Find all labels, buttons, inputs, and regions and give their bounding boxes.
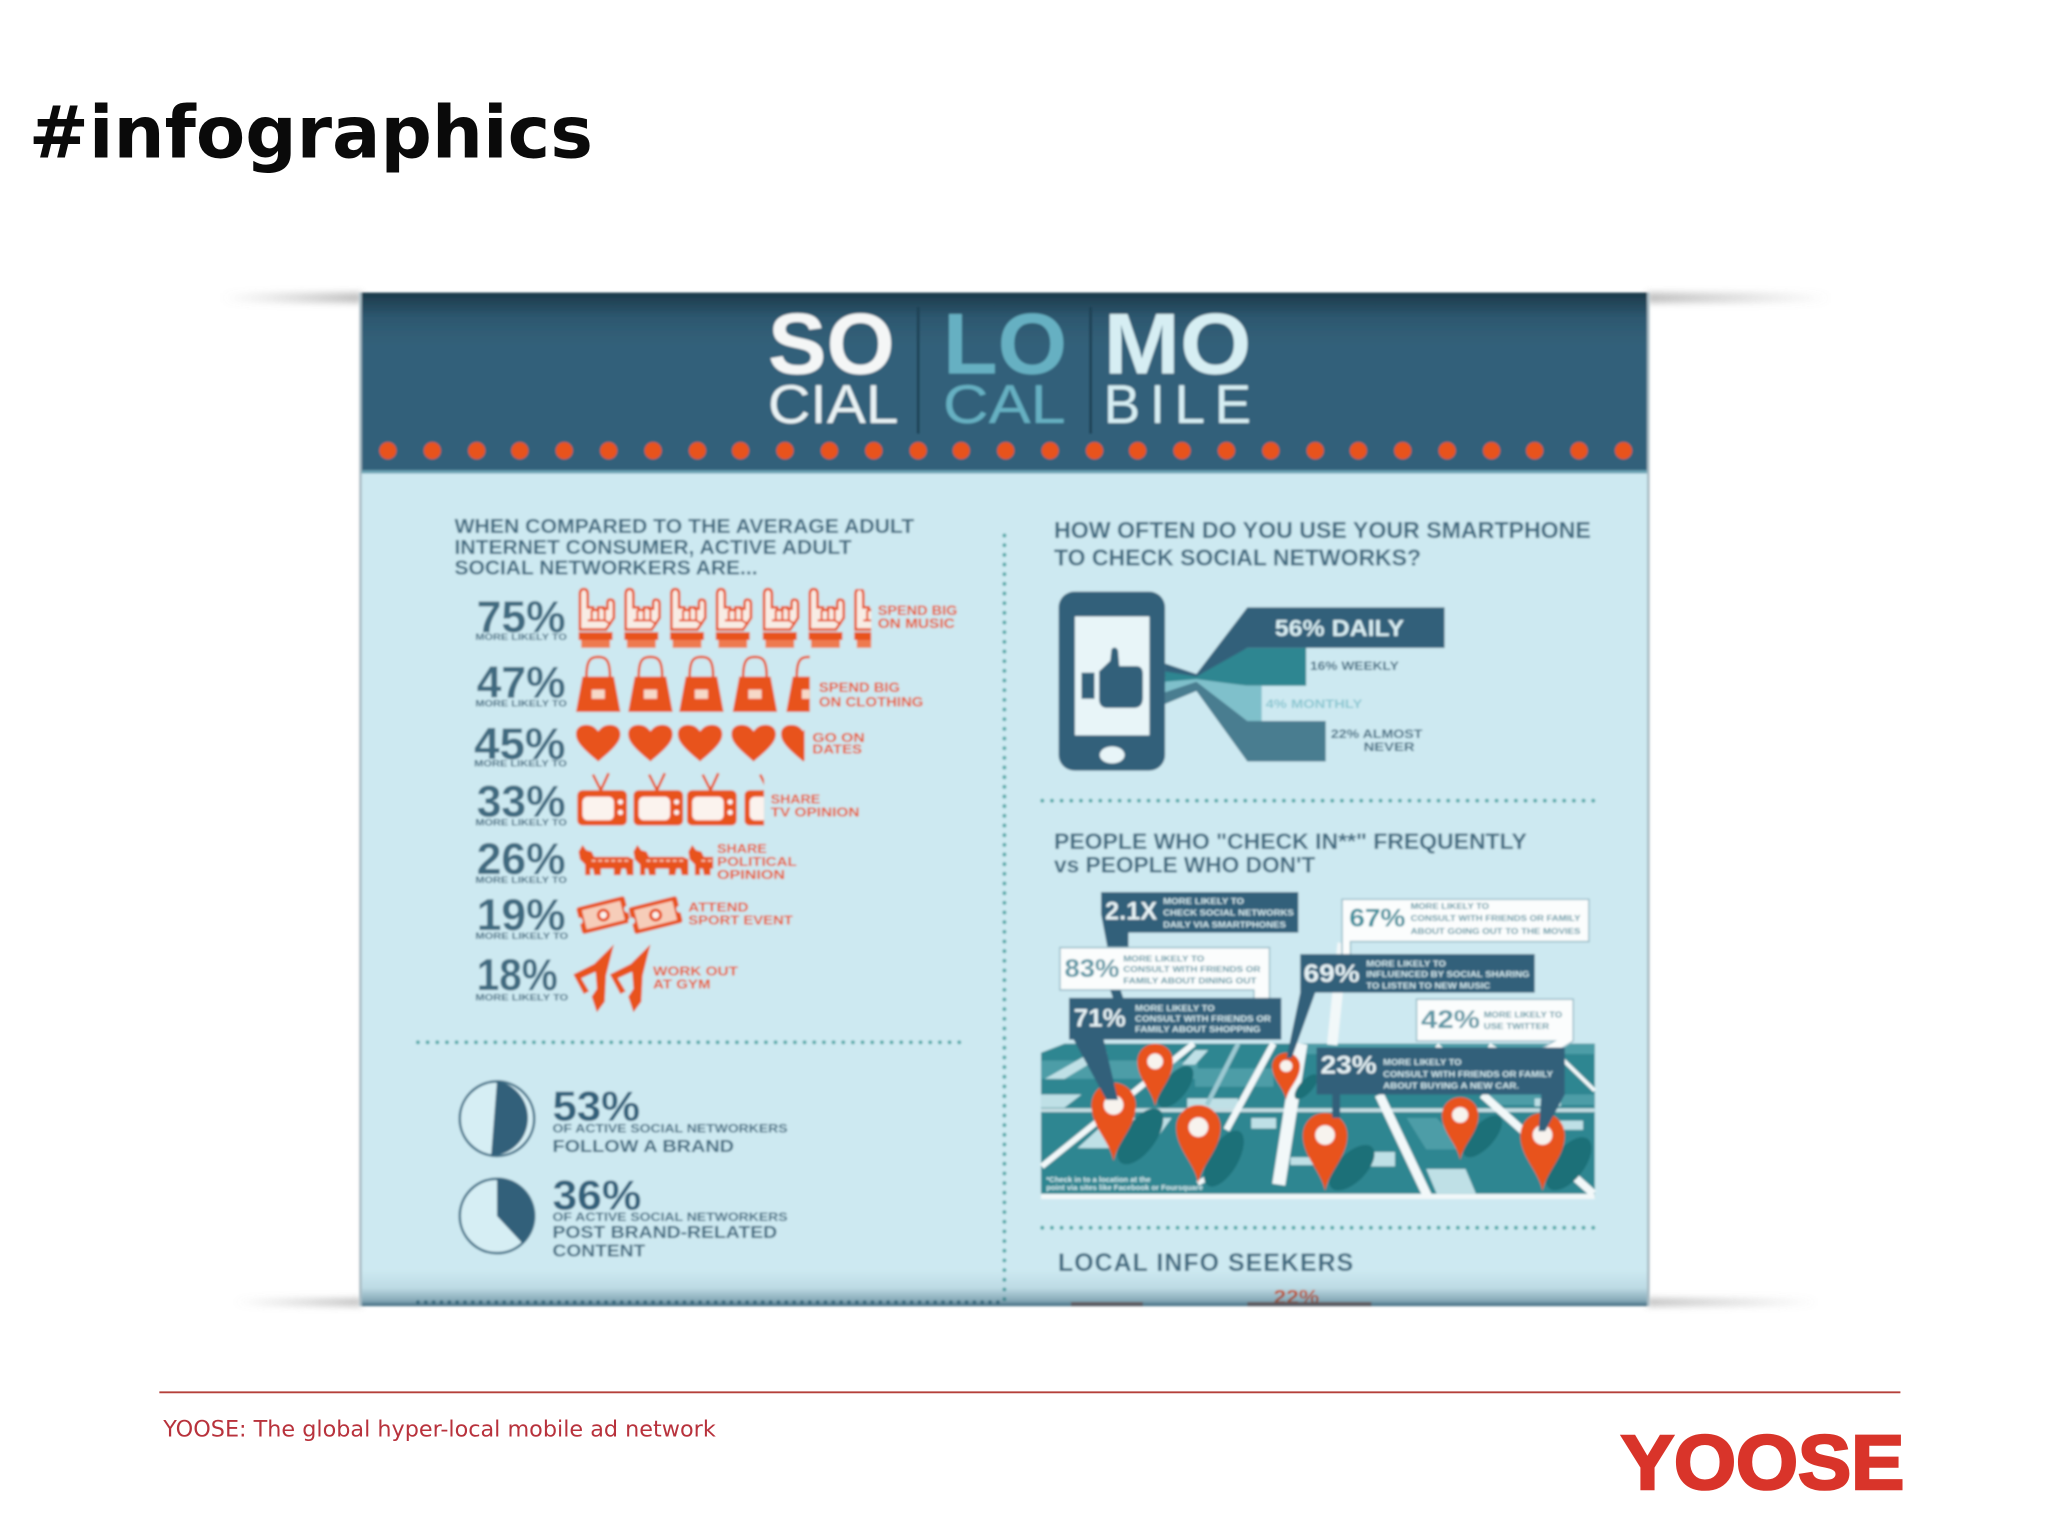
map footnote: *Check in to a location at the <box>1046 1176 1151 1184</box>
row: 33% tv opinion <box>475 773 859 827</box>
smartphone heading: HOW OFTEN DO YOU USE YOUR SMARTPHONE <box>1054 517 1591 543</box>
callout: 83%: CONSULT WITH FRIENDS OR <box>1123 964 1260 974</box>
callout: 67%: ABOUT GOING OUT TO THE MOVIES <box>1411 926 1581 936</box>
LOCAL wordmark: CAL <box>943 373 1066 435</box>
map illustration <box>1041 943 1600 1199</box>
SOCIAL wordmark: CIAL <box>768 373 899 435</box>
callout: 23%: 23% <box>1320 1053 1377 1080</box>
icon: donkeys <box>579 845 743 875</box>
cropped chart fragment <box>1071 1287 1371 1309</box>
icon: phone with thumbs up <box>1059 592 1165 771</box>
MOBILE wordmark: MO <box>1104 297 1251 393</box>
smartphone heading: TO CHECK SOCIAL NETWORKS? <box>1054 545 1421 571</box>
funnel chart: 16% WEEKLY <box>1310 660 1399 673</box>
label <box>771 791 859 819</box>
mid-tone blocks <box>1041 1044 1595 1149</box>
pie: 53% follow a brand <box>460 1081 788 1156</box>
label: DATES <box>812 742 862 757</box>
row: 18% gym <box>475 944 738 1012</box>
row: 47% clothing <box>475 657 923 712</box>
label: SHARE <box>717 841 767 856</box>
pie: 36% post brand content <box>460 1171 788 1260</box>
footer tagline: YOOSE: The global hyper-local mobile ad network <box>162 1417 716 1443</box>
label: TV OPINION <box>771 804 859 819</box>
infographic screenshot <box>222 293 1830 1309</box>
local info seekers heading: LOCAL INFO SEEKERS <box>1058 1250 1353 1277</box>
pale city blocks <box>1041 1050 1583 1194</box>
callout: 2.1X: 2.1X <box>1105 899 1158 926</box>
callout: 67%: 67% <box>1349 906 1405 933</box>
smartphone heading <box>1054 517 1591 571</box>
label: WORK OUT <box>653 964 738 979</box>
callout: 42% <box>1416 999 1573 1049</box>
callout: 23%: MORE LIKELY TO <box>1383 1057 1462 1067</box>
callout: 83%: 83% <box>1064 956 1119 983</box>
callout: 2.1X: DAILY VIA SMARTPHONES <box>1163 919 1286 929</box>
pie: 53% follow a brand: OF ACTIVE SOCIAL NETWORKERS <box>552 1122 788 1135</box>
pie: 36% post brand content: POST BRAND-RELATED <box>552 1222 777 1242</box>
MOBILE wordmark: BILE <box>1104 373 1251 435</box>
left column heading: INTERNET CONSUMER, ACTIVE ADULT <box>455 537 852 559</box>
icon: gymnasts <box>573 944 650 1012</box>
slide title: #infographics <box>29 90 593 174</box>
icon: foam hands <box>579 589 889 648</box>
row: 26% political opinion: MORE LIKELY TO <box>475 875 567 885</box>
callout: 67%: MORE LIKELY TO <box>1411 901 1489 911</box>
pie: 36% post brand content: 36% <box>552 1171 641 1218</box>
row: 19% sport event <box>475 891 793 941</box>
map footnote <box>1046 1176 1203 1192</box>
callout: 71%: FAMILY ABOUT SHOPPING <box>1135 1024 1261 1034</box>
funnel chart: 22% ALMOST <box>1331 728 1423 741</box>
callout: 42%: USE TWITTER <box>1484 1021 1549 1031</box>
location pins <box>1091 1044 1565 1191</box>
funnel chart: NEVER <box>1364 741 1415 754</box>
pie: 53% follow a brand: FOLLOW A BRAND <box>552 1136 734 1156</box>
left column heading <box>455 516 915 580</box>
row: 45% dates: MORE LIKELY TO <box>474 759 567 769</box>
label <box>688 900 793 928</box>
icon: handbags <box>576 657 831 712</box>
callout: 83% <box>1060 948 1270 999</box>
YOOSE logo: YOOSE <box>1621 1420 1904 1506</box>
LOCAL wordmark: LO <box>943 297 1067 393</box>
label <box>812 730 865 757</box>
pie chart 36 <box>460 1178 534 1253</box>
callout: 71% <box>1069 990 1281 1100</box>
label: SHARE <box>771 791 821 806</box>
callout: 71%: MORE LIKELY TO <box>1135 1003 1215 1013</box>
pie: 36% post brand content: CONTENT <box>552 1240 645 1260</box>
check-in heading <box>1054 829 1527 877</box>
icon: hearts <box>576 725 825 761</box>
orange dot row <box>379 442 1632 459</box>
label <box>878 603 957 631</box>
callout: 42%: MORE LIKELY TO <box>1484 1009 1563 1019</box>
callout: 69%: INFLUENCED BY SOCIAL SHARING <box>1366 969 1530 979</box>
callout: 69% <box>1287 954 1535 1058</box>
callout: 67% <box>1342 899 1589 956</box>
callout: 23% <box>1317 1048 1565 1131</box>
label: SPEND BIG <box>819 680 900 695</box>
callout: 71%: CONSULT WITH FRIENDS OR <box>1135 1013 1271 1023</box>
check-in heading: vs PEOPLE WHO DON'T <box>1054 852 1316 877</box>
row: 19% sport event: MORE LIKELY TO <box>475 931 568 941</box>
callout: 83%: FAMILY ABOUT DINING OUT <box>1123 976 1257 986</box>
pie: 36% post brand content: OF ACTIVE SOCIAL NETWORKERS <box>552 1211 788 1224</box>
label: GO ON <box>812 730 865 745</box>
funnel chart: 56% DAILY <box>1275 615 1404 641</box>
callout: 71%: 71% <box>1074 1006 1126 1033</box>
row: 18% gym: 18% <box>477 951 558 1000</box>
row: 75% music: 75% <box>477 593 566 642</box>
callout: 69%: 69% <box>1304 961 1360 988</box>
callout: 83%: MORE LIKELY TO <box>1123 953 1205 963</box>
callout: 42%: 42% <box>1421 1007 1480 1034</box>
SOCIAL wordmark <box>768 297 899 435</box>
row: 18% gym: MORE LIKELY TO <box>475 992 568 1002</box>
row: 47% clothing: 47% <box>477 658 566 707</box>
MOBILE wordmark <box>1104 297 1251 435</box>
LOCAL wordmark <box>943 297 1067 435</box>
shadow wings <box>222 293 1830 1306</box>
row: 75% music <box>475 589 957 648</box>
roads <box>1041 943 1595 1196</box>
panel background <box>359 293 1650 1306</box>
left column heading: WHEN COMPARED TO THE AVERAGE ADULT <box>455 516 915 538</box>
callout: 2.1X <box>1101 892 1298 948</box>
row: 47% clothing: MORE LIKELY TO <box>475 699 567 709</box>
label <box>653 964 738 992</box>
callout: 69%: MORE LIKELY TO <box>1366 959 1446 969</box>
row: 45% dates <box>474 720 865 769</box>
label: SPORT EVENT <box>688 913 793 928</box>
funnel chart <box>1165 607 1445 761</box>
callout: 2.1X: MORE LIKELY TO <box>1163 896 1245 906</box>
label: SPEND BIG <box>878 603 957 618</box>
header banner <box>362 293 1647 473</box>
label <box>819 680 923 710</box>
funnel chart: 4% MONTHLY <box>1266 698 1362 711</box>
callout: 23%: CONSULT WITH FRIENDS OR FAMILY <box>1383 1069 1553 1079</box>
bottom shadow <box>362 1270 1647 1306</box>
row: 26% political opinion <box>475 835 797 885</box>
icon: tickets <box>573 895 686 935</box>
row: 45% dates: 45% <box>474 720 566 769</box>
pie: 53% follow a brand: 53% <box>552 1083 640 1130</box>
label: AT GYM <box>653 977 711 992</box>
pie chart 53 <box>460 1081 534 1156</box>
callout: 23%: ABOUT BUYING A NEW CAR. <box>1383 1081 1519 1091</box>
label: ON CLOTHING <box>819 695 923 710</box>
label: ON MUSIC <box>878 616 955 631</box>
row: 19% sport event: 19% <box>477 891 566 940</box>
callout: 69%: TO LISTEN TO NEW MUSIC <box>1366 981 1490 991</box>
pin shadows <box>1108 1060 1600 1198</box>
callout: 67%: CONSULT WITH FRIENDS OR FAMILY <box>1411 913 1581 923</box>
label: ATTEND <box>688 900 748 915</box>
footer rule <box>159 1391 1900 1393</box>
map footnote: point via sites like Facebook or Foursquare <box>1046 1184 1203 1192</box>
icon: televisions <box>577 773 794 825</box>
row: 33% tv opinion: 33% <box>477 777 566 826</box>
label: POLITICAL <box>717 854 797 869</box>
callout: 2.1X: CHECK SOCIAL NETWORKS <box>1163 908 1294 918</box>
label: OPINION <box>717 867 785 882</box>
row: 33% tv opinion: MORE LIKELY TO <box>475 817 567 827</box>
row: 26% political opinion: 26% <box>477 835 566 884</box>
cropped chart fragment: 22% <box>1273 1287 1319 1309</box>
row: 75% music: MORE LIKELY TO <box>475 632 567 642</box>
check-in heading: PEOPLE WHO "CHECK IN**" FREQUENTLY <box>1054 829 1527 854</box>
left column heading: SOCIAL NETWORKERS ARE... <box>455 558 758 580</box>
SOCIAL wordmark: SO <box>768 297 895 393</box>
label <box>717 841 797 882</box>
